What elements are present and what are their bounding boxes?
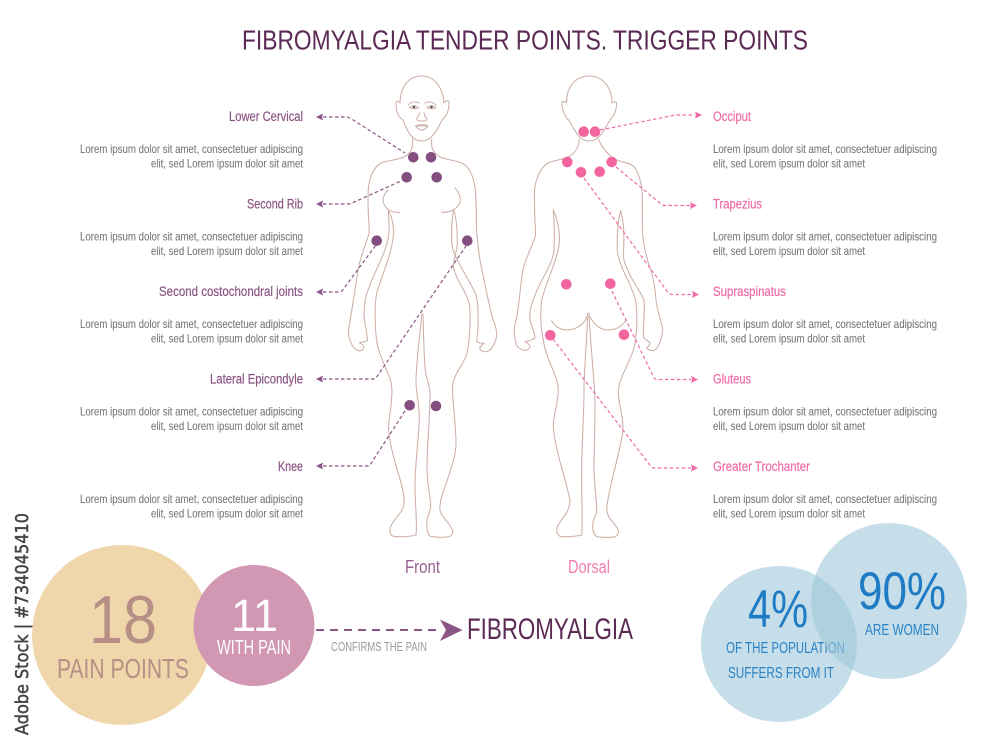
circle: 90 percent are women: 90% [858,562,946,621]
item: knee: elit, sed Lorem ipsum dolor sit amet [151,506,304,520]
item: gluteus: Lorem ipsum dolor sit amet, consectetuer adipiscing [713,404,937,418]
item: trapezius: elit, sed Lorem ipsum dolor sit amet [713,244,866,258]
item: greater trochanter: Lorem ipsum dolor sit amet, consectetuer adipiscing [713,492,937,506]
item: gluteus: Gluteus [713,372,751,386]
stock id label: Adobe Stock | #734045410 [12,513,33,735]
item: occiput: elit, sed Lorem ipsum dolor sit amet [713,156,866,170]
circle: 18 pain points: 18 [89,582,157,658]
item: second costochondral joints: elit, sed Lorem ipsum dolor sit amet [151,332,304,346]
leader lines: front [316,114,466,470]
item: gluteus [713,372,937,433]
circle: 18 pain points: PAIN POINTS [57,653,189,684]
right column: dorsal trigger point descriptions [713,109,937,520]
circle: 90 percent are women: ARE WOMEN [865,622,939,639]
item: greater trochanter [713,459,937,520]
item: trapezius: Lorem ipsum dolor sit amet, consectetuer adipiscing [713,230,937,244]
item: second rib: elit, sed Lorem ipsum dolor sit amet [151,244,304,258]
item: lower cervical [80,109,304,170]
item: trapezius: Trapezius [713,196,762,212]
item: lower cervical: elit, sed Lorem ipsum dolor sit amet [151,156,304,170]
tender points: front [371,152,473,411]
figure caption: front: Front [405,557,440,577]
item: lower cervical: Lorem ipsum dolor sit amet, consectetuer adipiscing [80,142,303,156]
circle: 4 percent of the population: SUFFERS FROM IT [728,665,834,682]
figure caption: dorsal: Dorsal [568,557,610,577]
item: knee [80,459,304,520]
circle: 4 percent of the population: OF THE POPULATION [726,640,845,657]
item: lower cervical: Lower Cervical [229,109,303,124]
item: knee: Knee [278,459,303,474]
item: greater trochanter: elit, sed Lorem ipsum dolor sit amet [713,506,866,520]
item: lateral epicondyle: elit, sed Lorem ipsum dolor sit amet [151,419,304,433]
item: lateral epicondyle: Lateral Epicondyle [210,372,303,386]
item: greater trochanter: Greater Trochanter [713,459,810,474]
tender points: dorsal [545,126,629,341]
item: second costochondral joints: Second costochondral joints [159,284,303,299]
item: second costochondral joints: Lorem ipsum dolor sit amet, consectetuer adipiscing [80,317,303,331]
item: second rib: Lorem ipsum dolor sit amet, consectetuer adipiscing [80,230,303,244]
item: occiput: Lorem ipsum dolor sit amet, consectetuer adipiscing [713,142,937,156]
item: supraspinatus: Lorem ipsum dolor sit amet, consectetuer adipiscing [713,317,937,331]
circle: 18 pain points [32,545,212,725]
circle: 11 with pain [194,565,314,686]
title: FIBROMYALGIA TENDER POINTS. TRIGGER POINTS [242,24,808,56]
item: second rib: Second Rib [247,196,303,212]
left column: front tender point descriptions [80,109,304,520]
item: trapezius [713,196,937,258]
circle: 4 percent of the population: 4% [748,580,808,639]
circle: 11 with pain: WITH PAIN [217,637,291,659]
figure: dorsal body outline [514,76,663,537]
caption: confirms the pain: CONFIRMS THE PAIN [331,640,427,654]
leader lines: dorsal [553,112,702,472]
figure: front body outline [348,76,497,537]
circle: 4 percent of the population [701,566,857,722]
item: second costochondral joints [80,284,304,346]
item: supraspinatus: Supraspinatus [713,284,786,299]
arrow: confirms to fibromyalgia [316,620,462,641]
item: knee: Lorem ipsum dolor sit amet, consectetuer adipiscing [80,492,303,506]
heading: fibromyalgia: FIBROMYALGIA [467,613,633,646]
item: supraspinatus: elit, sed Lorem ipsum dolor sit amet [713,332,866,346]
item: second rib [80,196,304,258]
circle: 11 with pain: 11 [231,590,278,641]
item: gluteus: elit, sed Lorem ipsum dolor sit amet [713,419,866,433]
item: occiput: Occiput [713,109,751,124]
item: supraspinatus [713,284,937,346]
item: lateral epicondyle [80,372,304,433]
item: lateral epicondyle: Lorem ipsum dolor sit amet, consectetuer adipiscing [80,404,303,418]
item: occiput [713,109,937,170]
face [408,102,436,130]
circle: 90 percent are women [811,523,967,679]
